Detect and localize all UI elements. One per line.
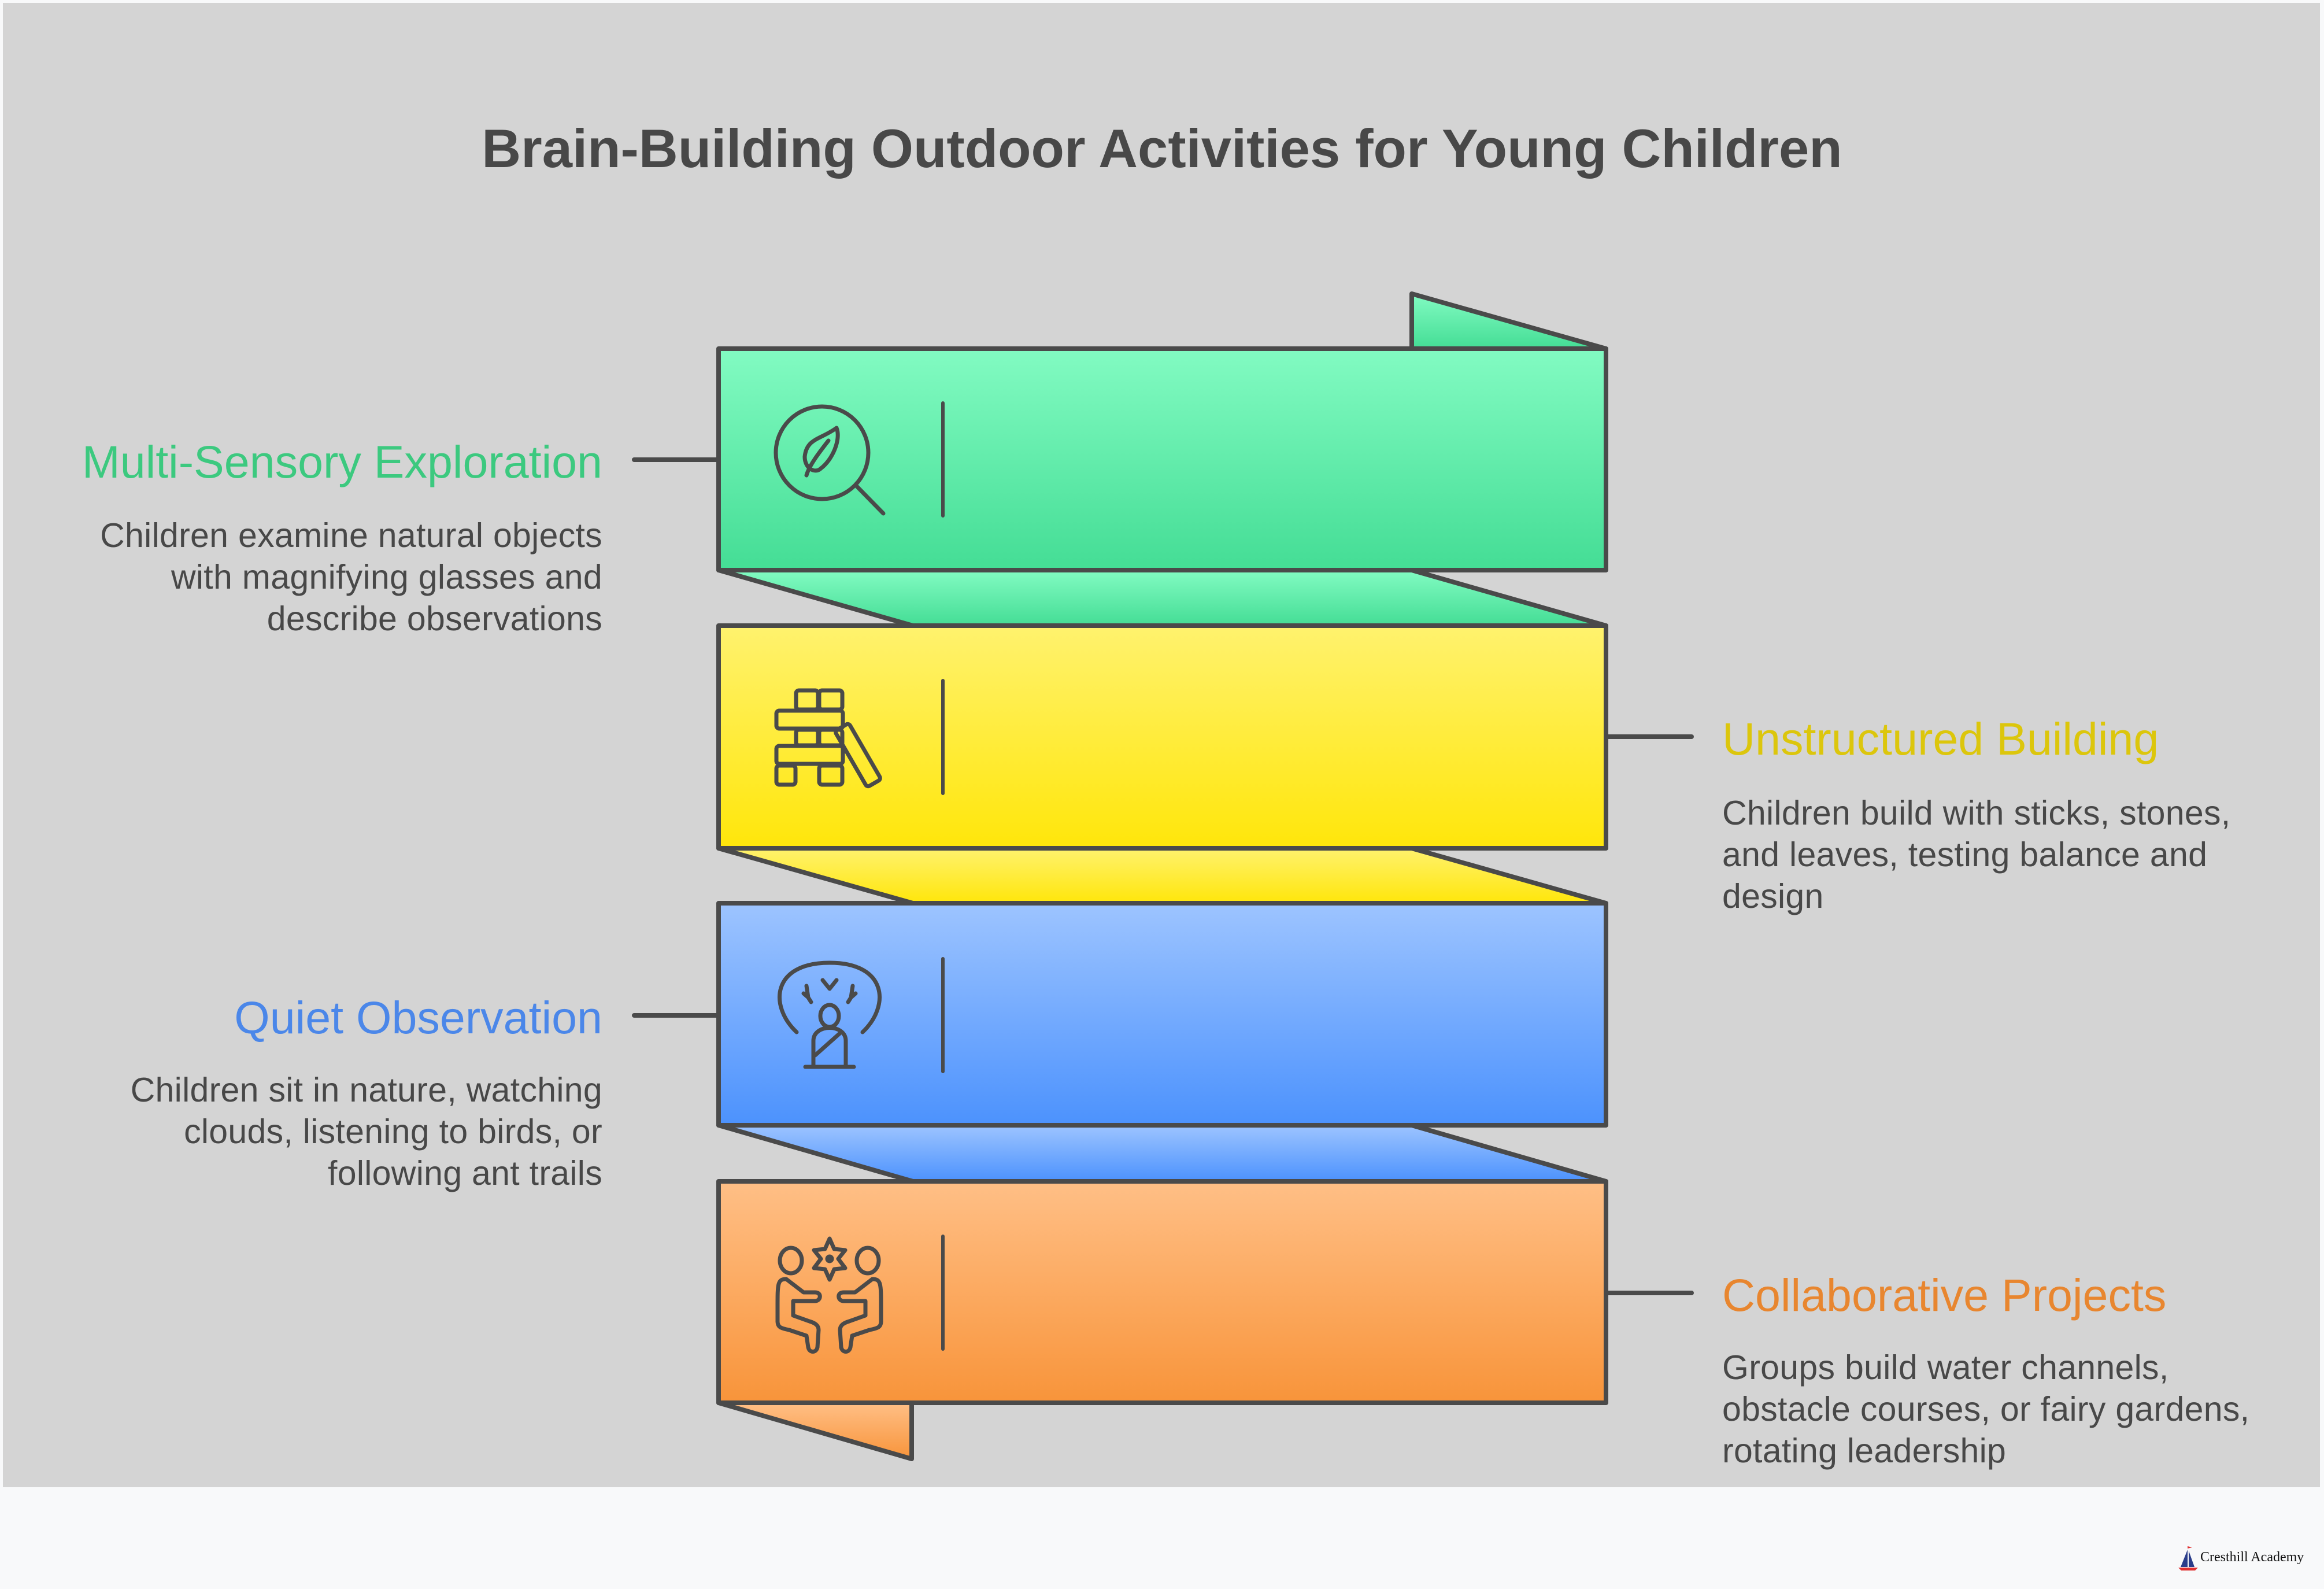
text: building description	[1722, 794, 2230, 915]
panel: green box	[719, 349, 1606, 570]
text: building description: and leaves, testing balance and	[1722, 836, 2207, 874]
title: Brain-Building Outdoor Activities for Young Children	[482, 118, 1842, 179]
icon: quiet observation	[780, 963, 879, 1067]
heading: Unstructured Building: Unstructured Building	[1722, 713, 2159, 764]
text: multi-sensory description: with magnifying glasses and	[171, 558, 602, 596]
heading: Quiet Observation: Quiet Observation	[234, 992, 602, 1043]
icon: collaboration	[778, 1239, 881, 1352]
folds	[719, 294, 1606, 1459]
text: collaborative description: rotating leadership	[1722, 1432, 2006, 1470]
icon: bricks	[776, 690, 881, 787]
panel: orange box	[719, 1181, 1606, 1403]
heading: Collaborative Projects: Collaborative Projects	[1722, 1269, 2166, 1321]
text: collaborative description: obstacle courses, or fairy gardens,	[1722, 1390, 2249, 1428]
connector lines	[634, 460, 1692, 1293]
text: collaborative description	[1722, 1348, 2249, 1470]
logo: Cresthill Academy	[2178, 1546, 2304, 1570]
text: multi-sensory description: Children examine natural objects	[100, 516, 602, 555]
text: Cresthill Academy	[2200, 1550, 2304, 1565]
text: quiet observation description	[131, 1071, 602, 1192]
text: building description: Children build with sticks, stones,	[1722, 794, 2230, 832]
heading: Multi-Sensory Exploration: Multi-Sensory Exploration	[82, 436, 602, 487]
text: building description: design	[1722, 877, 1824, 915]
panel: blue box	[719, 903, 1606, 1125]
text: collaborative description: Groups build water channels,	[1722, 1348, 2169, 1387]
text: quiet observation description: Children sit in nature, watching	[131, 1071, 602, 1109]
icon: magnifier with leaf	[776, 407, 883, 513]
text: quiet observation description: following ant trails	[328, 1154, 602, 1192]
text: multi-sensory description	[100, 516, 602, 638]
text: quiet observation description: clouds, listening to birds, or	[184, 1113, 602, 1151]
text: multi-sensory description: describe observations	[267, 600, 602, 638]
panel: yellow box	[719, 626, 1606, 848]
